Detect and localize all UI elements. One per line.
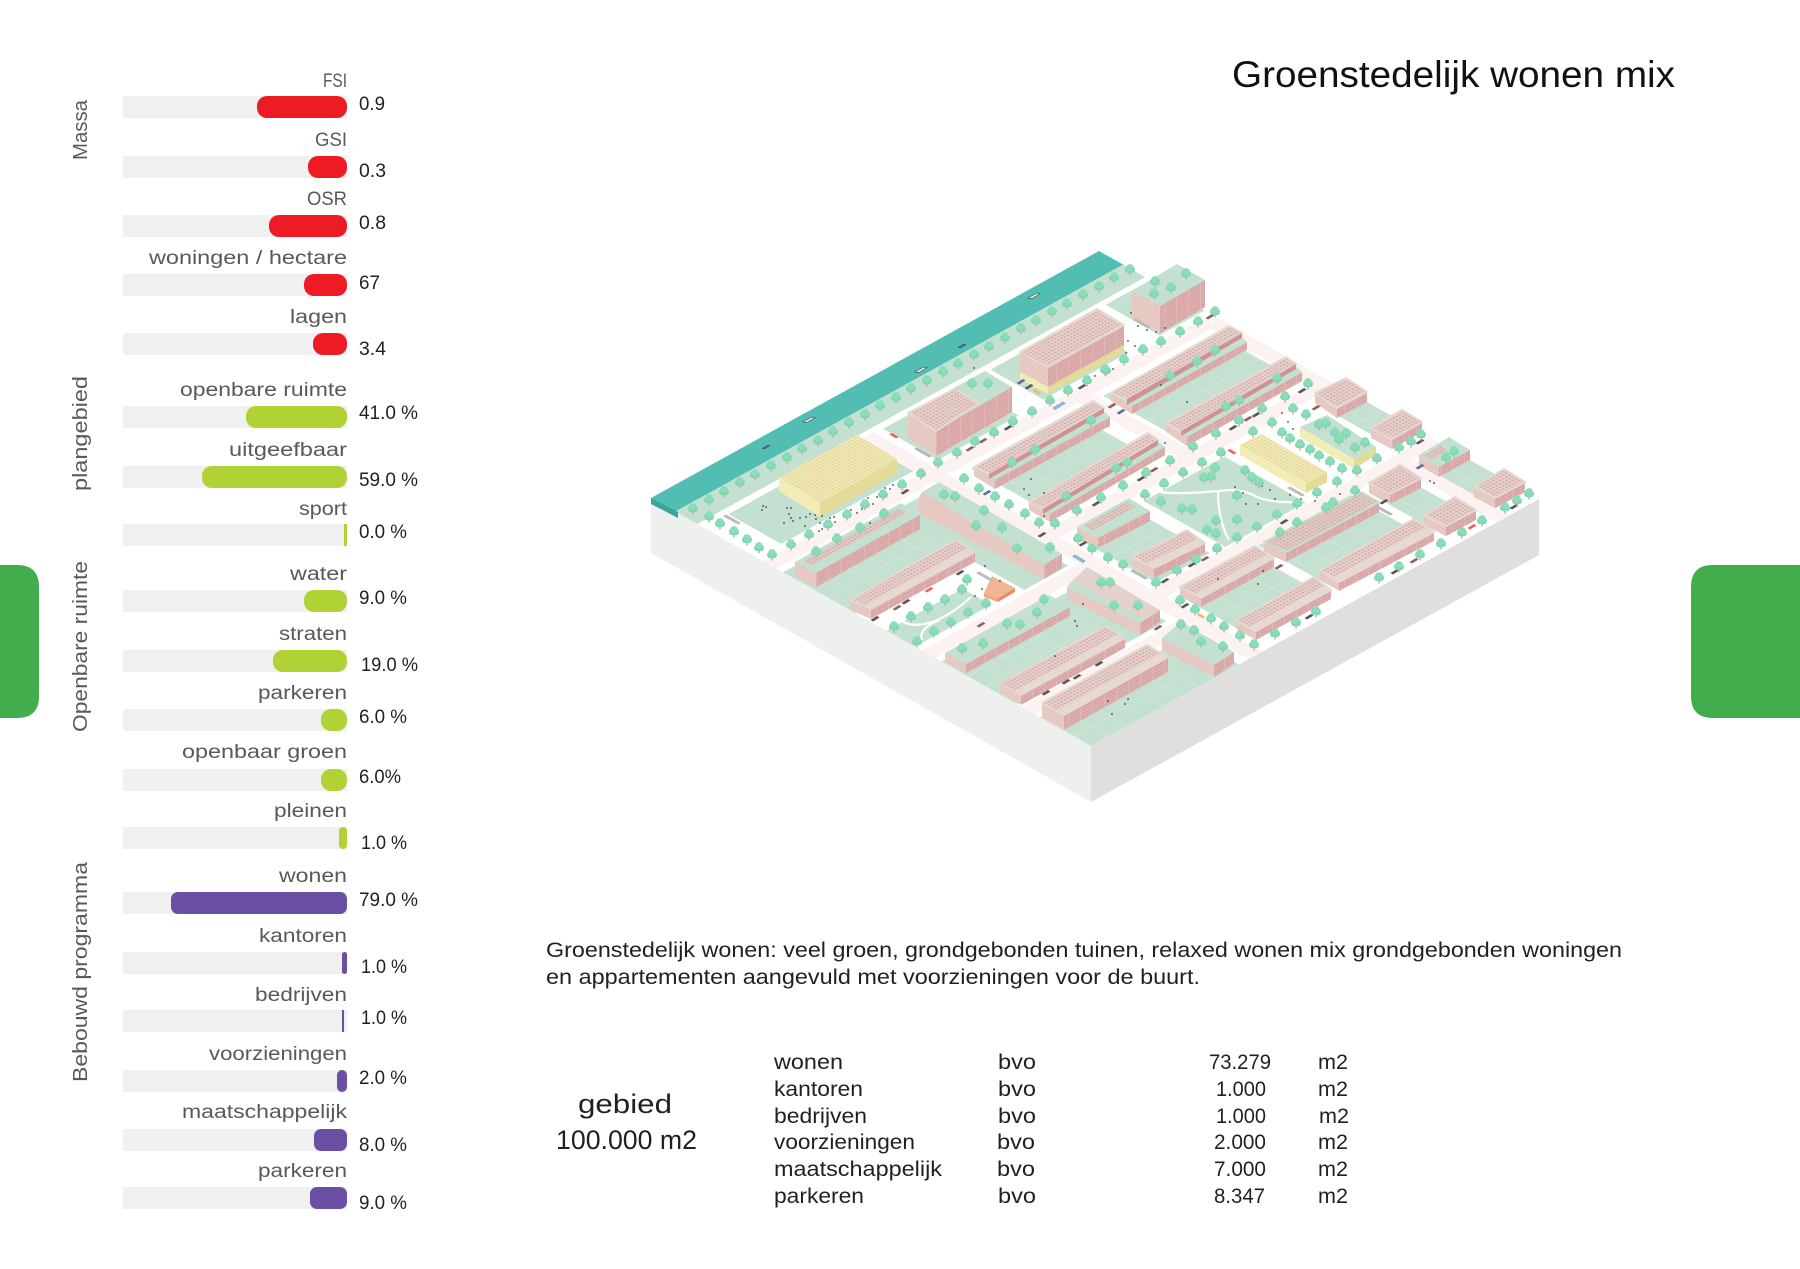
row: maatschappelijk: bvo [997, 1158, 1035, 1181]
row: bedrijven: m2 [1319, 1105, 1349, 1128]
building: row N3 [1264, 492, 1379, 562]
bar: GSI: 0.3 [359, 161, 386, 182]
bar: FSI: FSI [323, 71, 347, 92]
building: small block 1 [1315, 378, 1367, 418]
bar: pleinen: pleinen [274, 801, 347, 822]
bar: parkeren (bebouwd programma): parkeren [258, 1161, 347, 1182]
bar: OSR: 0.8 [359, 213, 386, 234]
right green tab [1691, 565, 1800, 718]
bar: sport [123, 499, 407, 546]
people [762, 312, 1434, 715]
bar: parkeren (openbare ruimte) [123, 683, 407, 731]
bar: FSI: 0.9 [359, 94, 385, 115]
bar: bedrijven [123, 985, 407, 1032]
building: yellow block with green roof [1300, 415, 1376, 469]
left green tab [0, 565, 39, 718]
building: tower on yellow plinth [1020, 309, 1124, 394]
building: row N5 [1180, 546, 1274, 607]
bar: GSI [123, 130, 386, 182]
row: parkeren: parkeren [774, 1185, 864, 1208]
building: row D8 [1042, 645, 1168, 730]
row: parkeren: 8.347 [1214, 1185, 1265, 1208]
building: row N1 [1077, 498, 1150, 548]
bar: woningen / hectare [123, 248, 380, 296]
building: small block 2 [1371, 410, 1422, 449]
bar: maatschappelijk: 8.0 % [359, 1135, 407, 1156]
building: small block 5 [1369, 465, 1421, 504]
row: voorzieningen: m2 [1318, 1131, 1348, 1154]
row: kantoren: m2 [1318, 1078, 1348, 1101]
row: bedrijven: bedrijven [774, 1105, 867, 1128]
group label: plangebied: plangebied [70, 376, 92, 491]
building: row N4 [1320, 519, 1434, 591]
area total: 100.000 m2 [556, 1125, 697, 1155]
row: maatschappelijk [774, 1158, 1348, 1181]
row: wonen: m2 [1318, 1051, 1348, 1074]
row: maatschappelijk: m2 [1318, 1158, 1348, 1181]
building: stepped row S1 [1111, 326, 1247, 414]
plinth: left face [651, 498, 1091, 802]
ground surface with plots, roads and water in plan coordinates [651, 251, 1539, 746]
bar: uitgeefbaar: 59.0 % [359, 470, 418, 491]
bar: straten: 19.0 % [361, 655, 418, 676]
green plots [702, 280, 1539, 746]
bar: uitgeefbaar: uitgeefbaar [229, 440, 348, 461]
bar: voorzieningen: 2.0 % [359, 1068, 407, 1089]
bar: sport: sport [299, 499, 348, 520]
title: Groenstedelijk wonen mix [1232, 54, 1676, 95]
bar: pleinen [123, 801, 407, 854]
row: wonen [773, 1051, 1348, 1074]
bike racks [723, 318, 1393, 582]
building: stepped block D4 [1067, 567, 1160, 635]
building: row D2 [850, 540, 975, 619]
building: stepped row D3 [918, 482, 1062, 579]
bar: lagen: 3.4 [359, 339, 386, 360]
bar: wonen: wonen [278, 866, 347, 887]
bar: voorzieningen: voorzieningen [209, 1044, 347, 1065]
bar: straten [123, 624, 418, 676]
boats on the canal [762, 293, 1040, 449]
park paths [903, 490, 1296, 640]
bar: woningen / hectare: woningen / hectare [148, 248, 347, 269]
building: small block 3 [1419, 437, 1470, 477]
bar: kantoren [123, 926, 407, 978]
building: stepped block D5 [1162, 622, 1234, 677]
isometric neighbourhood map [651, 251, 1539, 802]
row: voorzieningen: 2.000 [1214, 1131, 1266, 1154]
row: maatschappelijk: 7.000 [1214, 1158, 1266, 1181]
building: stepped row S3 [974, 401, 1110, 489]
bar: parkeren (bebouwd programma) [123, 1161, 407, 1214]
description line 2: en appartementen aangevuld met voorzieningen voor de buurt. [546, 966, 1200, 989]
bar: wonen: 79.0 % [359, 890, 418, 911]
bar: kantoren: kantoren [259, 926, 347, 947]
row: bedrijven [774, 1105, 1349, 1128]
area total: gebied [578, 1089, 672, 1119]
row: parkeren [774, 1185, 1348, 1208]
row: wonen: 73.279 [1209, 1051, 1271, 1074]
row: bedrijven: 1.000 [1216, 1105, 1266, 1128]
programme table [773, 1051, 1349, 1208]
water canal [651, 251, 1123, 512]
bar: voorzieningen [123, 1044, 407, 1092]
group label: Massa: Massa [70, 99, 92, 160]
row: parkeren: m2 [1318, 1185, 1348, 1208]
row: wonen: wonen [773, 1051, 843, 1074]
row: kantoren: kantoren [774, 1078, 863, 1101]
bar: openbaar groen: openbaar groen [182, 742, 347, 763]
row: bedrijven: bvo [998, 1105, 1036, 1128]
bar: sport: 0.0 % [359, 522, 407, 543]
bar: parkeren (openbare ruimte): 6.0 % [359, 707, 407, 728]
building: large yellow hall [779, 435, 897, 517]
cars and buses [870, 314, 1518, 696]
bar: OSR [123, 189, 386, 237]
bar: FSI [123, 71, 385, 118]
building: tall block with green roof terrace [908, 371, 1012, 456]
trees [688, 264, 1534, 654]
building: orange pavilion [984, 576, 1015, 602]
row: voorzieningen [774, 1131, 1348, 1154]
row: parkeren: bvo [998, 1185, 1036, 1208]
bar: woningen / hectare: 67 [359, 273, 380, 294]
bar: lagen: lagen [290, 307, 347, 328]
bar: lagen [123, 307, 386, 360]
group label: Openbare ruimte: Openbare ruimte [70, 561, 92, 732]
building: small block 6 [1424, 497, 1476, 536]
building: row N6 [1236, 577, 1331, 640]
canal front edge [651, 498, 678, 518]
row: voorzieningen: voorzieningen [774, 1131, 915, 1154]
bar: uitgeefbaar [123, 440, 418, 491]
group label: Bebouwd programma: Bebouwd programma [70, 861, 92, 1082]
bar: kantoren: 1.0 % [361, 957, 407, 978]
bar: pleinen: 1.0 % [361, 833, 407, 854]
building: row D7 [1000, 626, 1125, 705]
row: maatschappelijk: maatschappelijk [774, 1158, 943, 1181]
building: row D6 [945, 595, 1070, 673]
bar: maatschappelijk: maatschappelijk [182, 1102, 348, 1123]
row: kantoren: 1.000 [1216, 1078, 1266, 1101]
bar: openbare ruimte [123, 380, 418, 428]
bar: water: water [289, 564, 348, 585]
garden grid lines [783, 325, 1539, 746]
bar: GSI: GSI [315, 130, 347, 151]
row: wonen: bvo [998, 1051, 1036, 1074]
building: row D1 [795, 503, 920, 587]
building: stepped row S4 [1029, 433, 1165, 522]
row: kantoren: bvo [998, 1078, 1036, 1101]
bar: maatschappelijk [123, 1102, 407, 1156]
bar: OSR: OSR [307, 189, 347, 210]
bar: water: 9.0 % [359, 588, 407, 609]
bar: water [123, 564, 407, 612]
description text [546, 939, 1622, 989]
bar: straten: straten [279, 624, 347, 645]
building: small block 4 [1474, 469, 1525, 508]
pink roads [702, 280, 1539, 746]
building: row N2 [1132, 530, 1205, 578]
description text: Groenstedelijk wonen: veel groen, grondgebonden tuinen, relaxed wonen mix grondgebonden woningen [546, 939, 1622, 962]
bar: parkeren (bebouwd programma): 9.0 % [359, 1193, 407, 1214]
plinth: right face [1091, 499, 1539, 802]
bar: openbaar groen [123, 742, 401, 791]
bar: openbare ruimte: openbare ruimte [180, 380, 347, 401]
bar: openbaar groen: 6.0% [359, 767, 401, 788]
bar: parkeren (openbare ruimte): parkeren [258, 683, 347, 704]
area total [556, 1089, 697, 1155]
bar: bedrijven: bedrijven [255, 985, 347, 1006]
building: yellow mid block [1240, 434, 1327, 493]
left panel: indicator bar charts [70, 71, 418, 1214]
bar: wonen [123, 866, 418, 914]
row: voorzieningen: bvo [997, 1131, 1035, 1154]
row: kantoren [774, 1078, 1348, 1101]
building: green roof tower [1132, 264, 1205, 333]
building: stepped row S2 [1166, 357, 1302, 446]
green strip along the canal [675, 265, 1145, 524]
bar: openbare ruimte: 41.0 % [359, 403, 418, 424]
bar: bedrijven: 1.0 % [361, 1008, 407, 1029]
